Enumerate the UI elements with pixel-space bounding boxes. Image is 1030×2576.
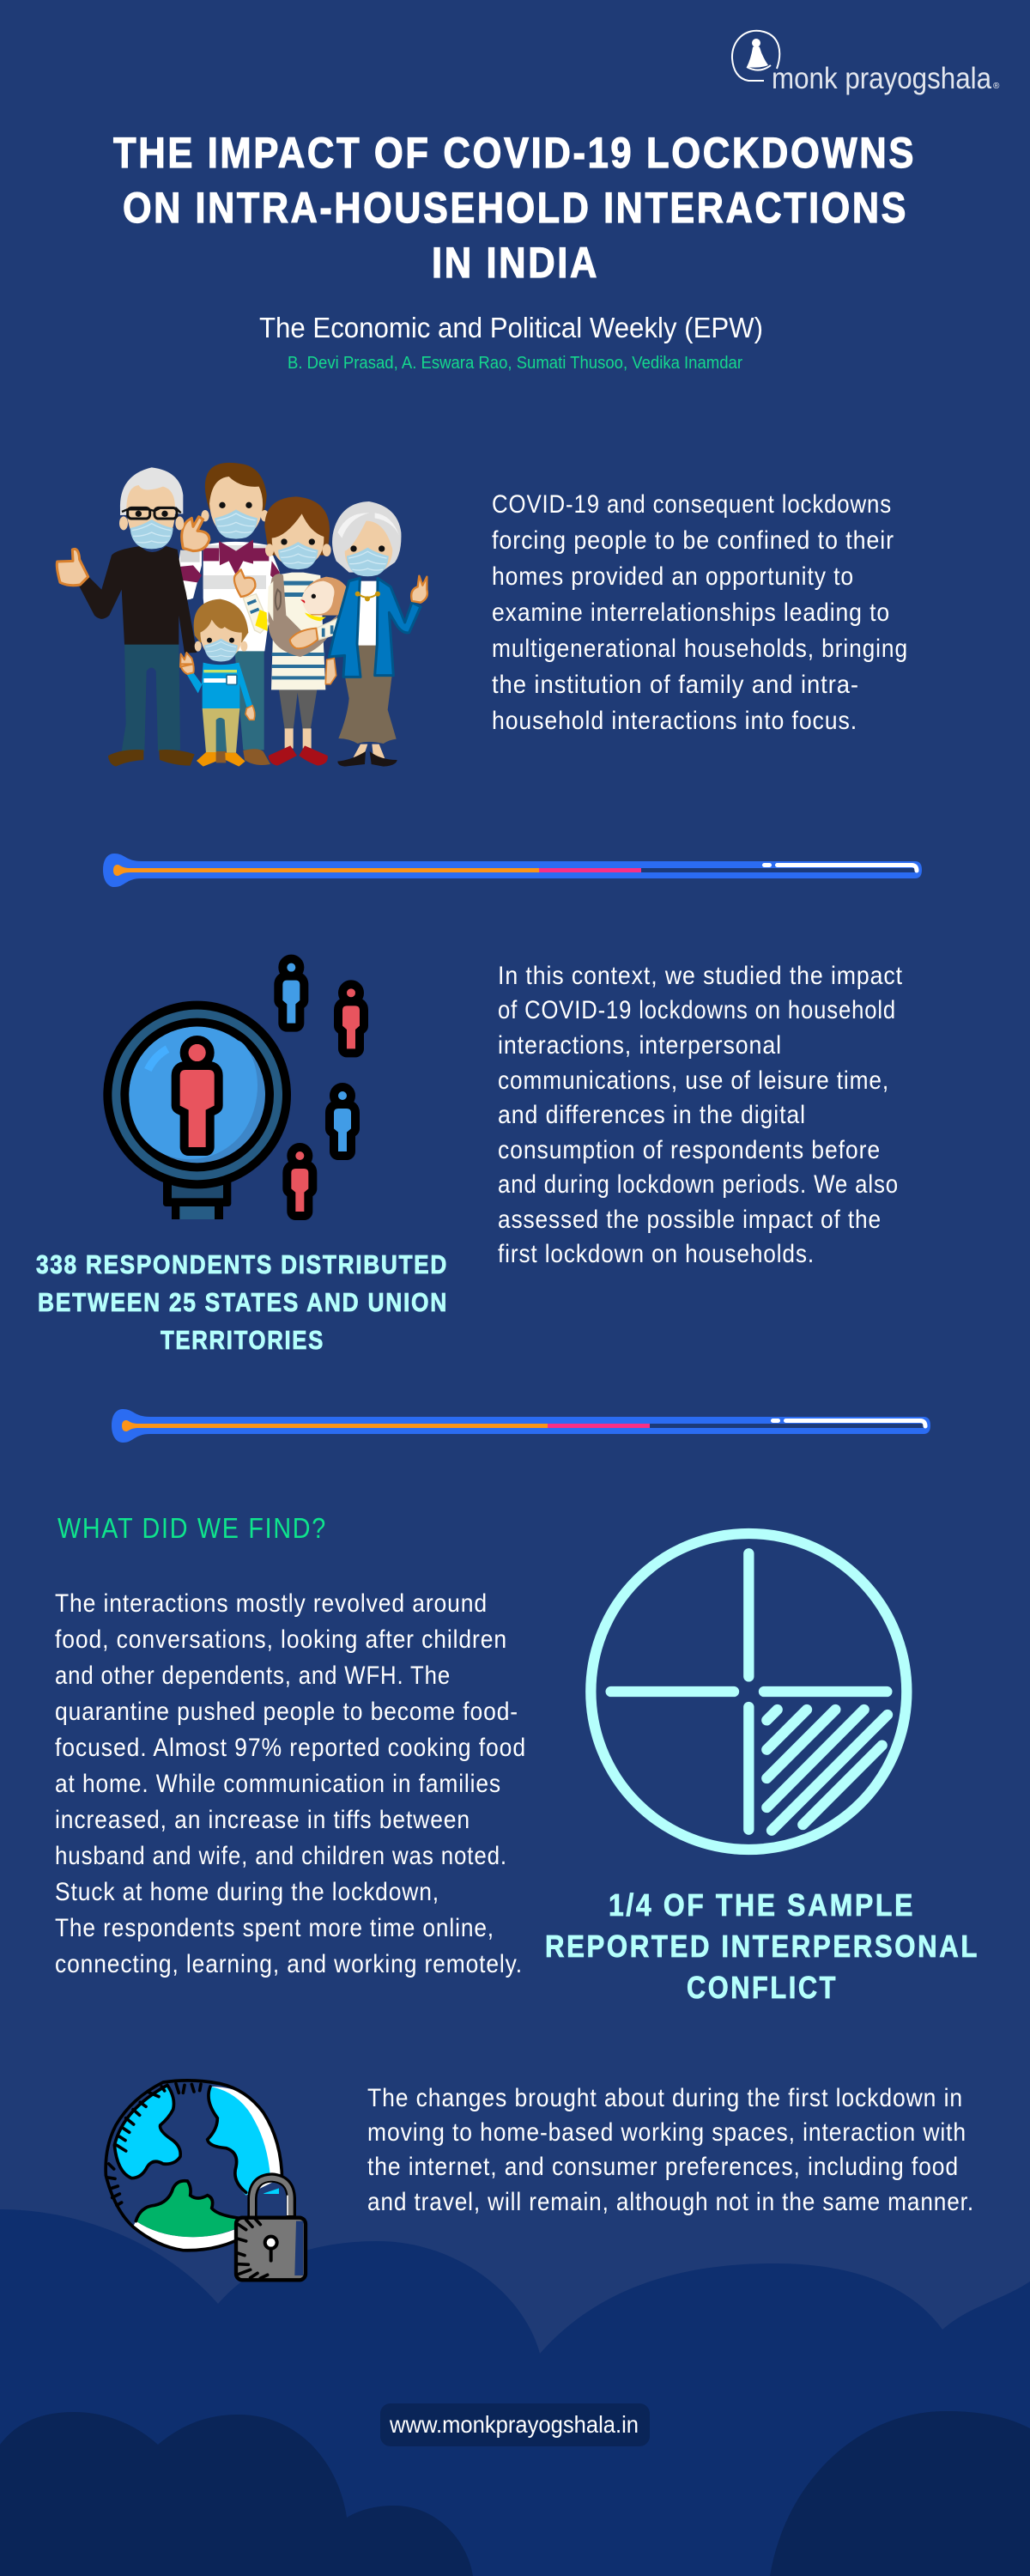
logo: monk prayogshala: ® xyxy=(993,82,1000,91)
intro paragraph: forcing people to be confined to their xyxy=(492,526,894,555)
closing paragraph: the internet, and consumer preferences, including food xyxy=(367,2153,959,2181)
logo: monk prayogshala: monk prayogshala xyxy=(772,62,991,95)
grandpa xyxy=(122,642,180,751)
icon: globe with padlock xyxy=(106,2081,306,2280)
stat: one quarter conflict: 1/4 OF THE SAMPLE xyxy=(609,1887,915,1923)
closing paragraph: The changes brought about during the first lockdown in xyxy=(367,2084,963,2112)
subtitle: The Economic and Political Weekly (EPW) xyxy=(259,312,763,343)
findings paragraph: The respondents spent more time online, xyxy=(55,1914,494,1942)
boy xyxy=(203,708,239,753)
background hills: mid layer xyxy=(0,2209,1030,2576)
findings paragraph: quarantine pushed people to become food- xyxy=(55,1698,518,1726)
context paragraph: assessed the possible impact of the xyxy=(498,1206,882,1234)
stat: 338 respondents: BETWEEN 25 STATES AND UNION xyxy=(38,1287,448,1317)
context paragraph: of COVID-19 lockdowns on household xyxy=(498,996,896,1024)
heading: what did we find: WHAT DID WE FIND? xyxy=(58,1512,327,1544)
title xyxy=(113,129,916,287)
findings paragraph xyxy=(55,1589,526,1978)
mother xyxy=(279,690,317,730)
findings paragraph: and other dependents, and WFH. The xyxy=(55,1662,451,1690)
context paragraph: In this context, we studied the impact xyxy=(498,962,903,990)
divider: thermometer 2 xyxy=(112,1409,930,1443)
title: ON INTRA-HOUSEHOLD INTERACTIONS xyxy=(123,184,908,232)
context paragraph: and differences in the digital xyxy=(498,1101,806,1129)
context paragraph: communications, use of leisure time, xyxy=(498,1066,889,1095)
findings paragraph: Stuck at home during the lockdown, xyxy=(55,1878,439,1906)
logo: monk prayogshala xyxy=(732,31,1000,95)
stat: one quarter conflict xyxy=(545,1887,979,2005)
title: IN INDIA xyxy=(432,239,599,287)
closing paragraph xyxy=(367,2084,974,2216)
findings paragraph: connecting, learning, and working remotely. xyxy=(55,1950,523,1978)
website pill xyxy=(380,2403,650,2446)
context paragraph: first lockdown on households. xyxy=(498,1240,815,1268)
intro paragraph: examine interrelationships leading to xyxy=(492,598,890,627)
intro paragraph: COVID-19 and consequent lockdowns xyxy=(492,490,892,519)
intro paragraph: household interactions into focus. xyxy=(492,707,857,735)
closing paragraph: moving to home-based working spaces, interaction with xyxy=(367,2118,966,2147)
context paragraph: interactions, interpersonal xyxy=(498,1031,782,1060)
findings paragraph: at home. While communication in families xyxy=(55,1770,501,1798)
stat: one quarter conflict: CONFLICT xyxy=(687,1970,838,2005)
intro paragraph: the institution of family and intra- xyxy=(492,671,859,699)
chart: one quarter pie xyxy=(591,1534,906,1850)
findings paragraph: The interactions mostly revolved around xyxy=(55,1589,488,1618)
divider: thermometer 1 xyxy=(103,854,922,887)
findings paragraph: increased, an increase in tiffs between xyxy=(55,1806,470,1834)
intro paragraph: multigenerational households, bringing xyxy=(492,635,908,663)
stat: 338 respondents: 338 RESPONDENTS DISTRIBUTED xyxy=(36,1249,448,1279)
intro paragraph xyxy=(492,490,908,735)
man behind xyxy=(215,650,264,753)
stat: 338 respondents xyxy=(36,1249,448,1355)
findings paragraph: focused. Almost 97% reported cooking food xyxy=(55,1734,526,1762)
context paragraph xyxy=(498,962,903,1268)
background hills: dark layer xyxy=(0,2411,1030,2576)
findings paragraph: husband and wife, and children was noted. xyxy=(55,1842,507,1870)
title: THE IMPACT OF COVID-19 LOCKDOWNS xyxy=(113,129,916,177)
context paragraph: consumption of respondents before xyxy=(498,1136,881,1164)
website pill: www.monkprayogshala.in xyxy=(389,2411,639,2438)
grandmother xyxy=(352,744,385,760)
findings paragraph: food, conversations, looking after children xyxy=(55,1625,507,1654)
authors: B. Devi Prasad, A. Eswara Rao, Sumati Thusoo, Vedika Inamdar xyxy=(288,354,742,373)
context paragraph: and during lockdown periods. We also xyxy=(498,1170,899,1199)
intro paragraph: homes provided an opportunity to xyxy=(492,562,854,591)
illustration: masked family xyxy=(57,463,427,767)
stat: 338 respondents: TERRITORIES xyxy=(161,1325,324,1355)
icon: magnifier over people xyxy=(103,959,360,1219)
